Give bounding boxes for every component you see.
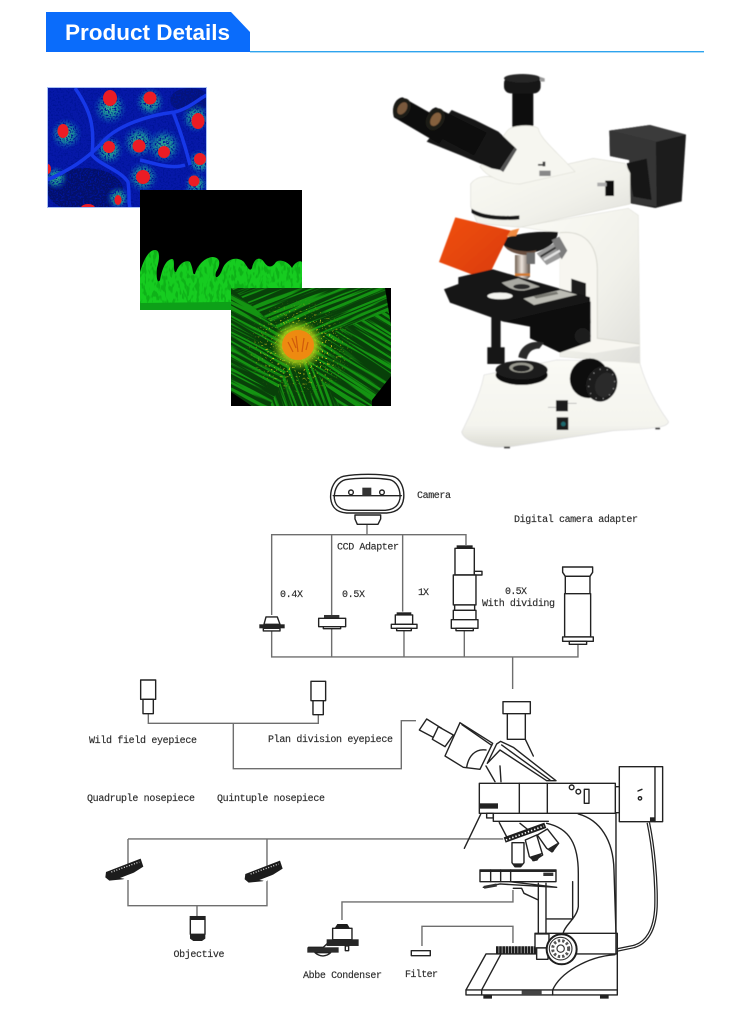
prism wedge	[487, 741, 556, 781]
accessory connection diagram	[87, 474, 663, 999]
coaxial block	[535, 934, 549, 959]
feet	[504, 428, 660, 448]
objectives	[515, 237, 567, 280]
0.4X adapter	[259, 617, 285, 631]
label: Quintuple nosepiece: Quintuple nosepiece	[217, 793, 325, 805]
label: 0.5X: 0.5X	[342, 590, 365, 601]
power controls	[548, 400, 577, 430]
trinocular port tube	[504, 74, 545, 128]
head controls	[538, 162, 614, 196]
connector lines	[128, 714, 513, 946]
eyepiece right	[422, 105, 487, 155]
head housing	[471, 158, 630, 227]
support pillar	[487, 317, 505, 364]
fluorescence image: green villi on black	[140, 190, 302, 310]
nosepiece	[502, 232, 558, 254]
stage	[480, 870, 557, 887]
label: 0.4X: 0.4X	[280, 590, 303, 601]
stage	[444, 269, 591, 327]
label: 1X: 1X	[418, 588, 429, 599]
header tab	[46, 12, 250, 52]
nosepiece	[499, 823, 545, 840]
stage knob	[575, 328, 591, 344]
digital camera adapter	[563, 567, 593, 644]
eyepiece tube	[419, 719, 453, 747]
camera and adapters	[259, 474, 593, 689]
cable	[617, 823, 656, 950]
base	[462, 360, 669, 447]
orange filter shield	[439, 217, 511, 280]
label: Camera: Camera	[417, 491, 451, 502]
quadruple nosepiece icon	[105, 859, 143, 881]
objectives	[512, 829, 559, 867]
stage support	[513, 882, 573, 934]
binocular body	[427, 110, 517, 172]
product photo: fluorescence microscope	[390, 74, 686, 448]
section header: Product Details	[46, 12, 704, 52]
head slit	[472, 209, 519, 220]
lamp port arc	[518, 342, 544, 359]
heading text: Product Details	[65, 20, 230, 45]
fluorescence image: blue cells with red nuclei	[44, 87, 213, 212]
label: Quadruple nosepiece: Quadruple nosepiece	[87, 793, 195, 805]
label: Digital camera adapter: Digital camera adapter	[514, 514, 638, 526]
filter icon	[411, 951, 430, 956]
label: Plan division eyepiece: Plan division eyepiece	[268, 734, 393, 746]
0.5X dividing adapter	[451, 545, 482, 631]
binocular body	[445, 723, 493, 769]
eyepieces and nosepieces	[105, 680, 513, 956]
label: Objective: Objective	[174, 949, 224, 961]
header underline	[250, 51, 704, 52]
camera icon	[331, 474, 404, 524]
trinocular tube	[503, 702, 533, 756]
wild field eyepiece icon	[141, 680, 156, 714]
lamp housing	[609, 125, 686, 208]
plan division eyepiece icon	[311, 681, 326, 715]
coarse focus knob	[563, 352, 622, 406]
Abbe condenser icon	[307, 924, 359, 956]
connector lines	[272, 524, 578, 689]
rear arm slot	[571, 279, 586, 302]
label: CCD Adapter: CCD Adapter	[337, 542, 399, 554]
base	[466, 933, 617, 999]
quintuple nosepiece icon	[245, 861, 283, 883]
lamp box	[615, 767, 663, 822]
schematic microscope	[419, 702, 663, 999]
label: 0.5X with dividing: 0.5X	[505, 587, 527, 598]
focus wheel	[547, 934, 577, 964]
label: Abbe Condenser: Abbe Condenser	[303, 970, 382, 982]
label: With dividing: With dividing	[482, 598, 555, 610]
objective icon	[190, 916, 206, 941]
trinocular head	[480, 126, 575, 184]
stage drive	[504, 302, 591, 353]
1X adapter	[391, 612, 417, 631]
eyepiece left	[390, 95, 452, 144]
label: Wild field eyepiece: Wild field eyepiece	[89, 735, 197, 747]
head housing	[464, 783, 615, 848]
arm	[547, 813, 616, 953]
stage drive gear	[496, 938, 537, 962]
arm	[520, 208, 640, 363]
fluorescence image: green fibres with orange centre	[231, 288, 391, 406]
0.5X adapter	[319, 615, 346, 629]
label: Filter: Filter	[405, 969, 438, 981]
field diaphragm	[496, 361, 548, 385]
